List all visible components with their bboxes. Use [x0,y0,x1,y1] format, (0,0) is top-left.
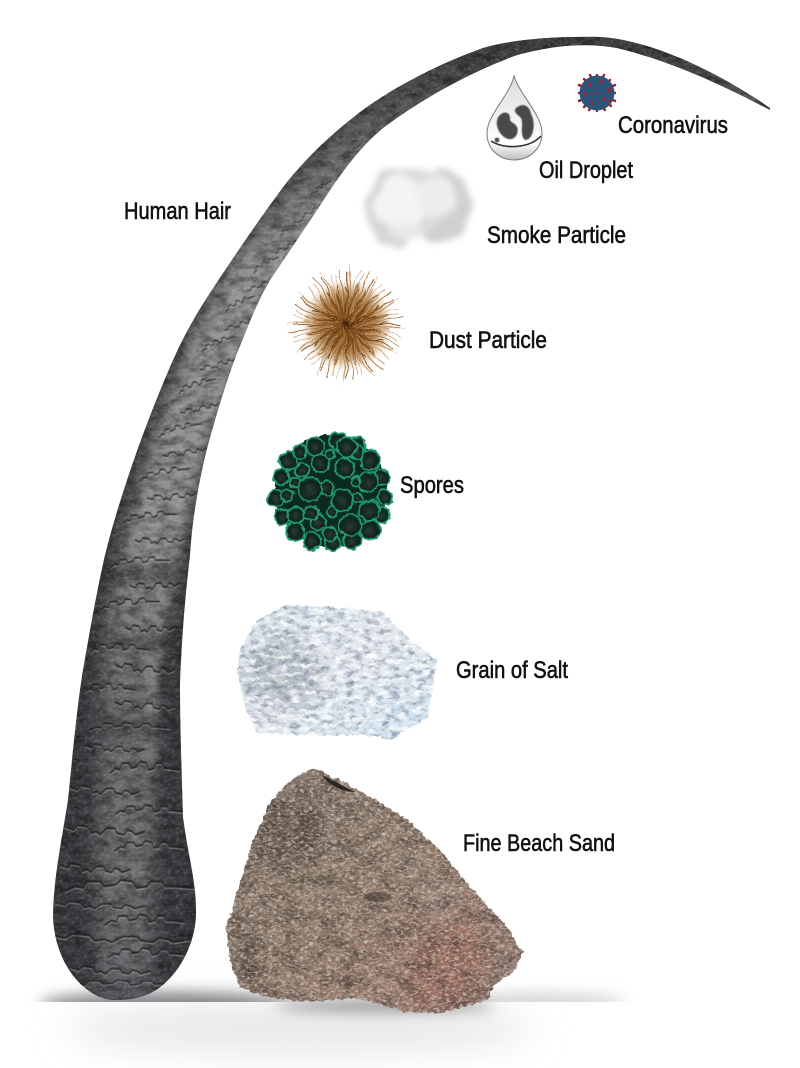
spore [268,432,392,551]
label: dust particle: Dust Particle [429,327,547,354]
label: coronavirus: Coronavirus [618,112,728,139]
label: spores: Spores [400,472,464,499]
salt grain [236,604,438,740]
sand grain [220,760,530,1020]
droplet inner reflections [495,105,534,142]
label: fine beach sand: Fine Beach Sand [463,830,615,857]
oil droplet [487,76,542,160]
smoke particle [366,168,471,248]
coronavirus [579,75,615,111]
label: human hair: Human Hair [124,198,231,225]
dust particle [283,261,411,389]
sand cavity [322,775,355,792]
label: smoke particle: Smoke Particle [487,222,626,249]
label: grain of salt: Grain of Salt [456,657,568,684]
label: oil droplet: Oil Droplet [539,157,633,184]
floor shading [40,992,625,1054]
